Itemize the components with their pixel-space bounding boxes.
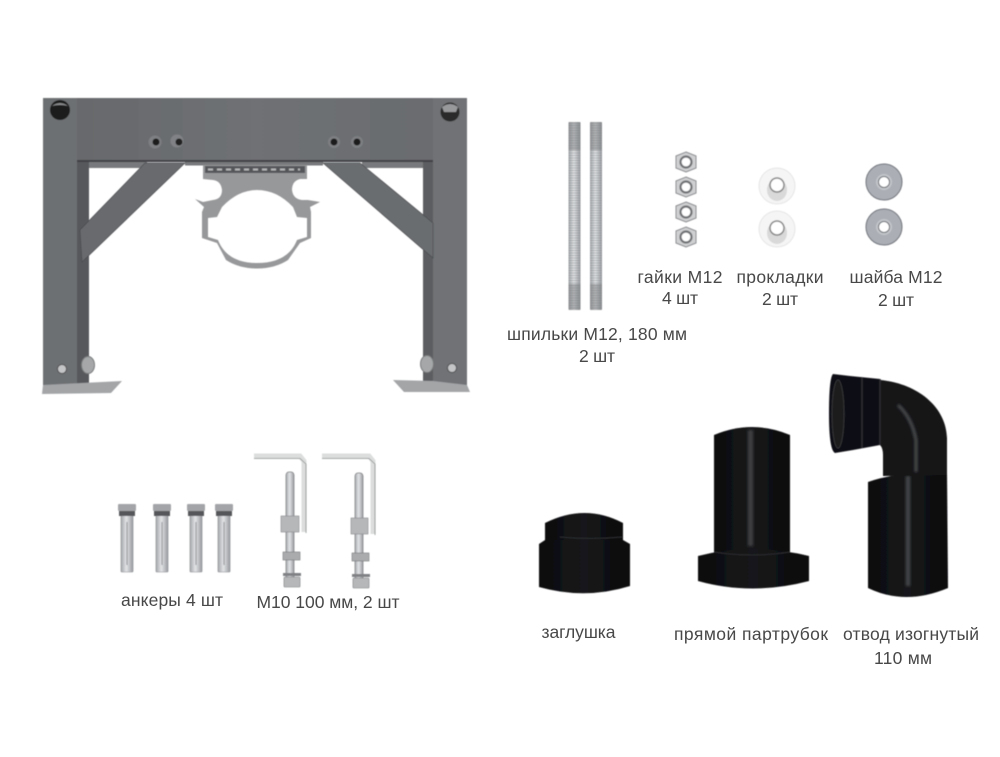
left foot: [42, 381, 122, 394]
plug: [539, 513, 630, 593]
plug lower body: [539, 540, 630, 593]
washer 1: [866, 164, 902, 200]
gasket 2: [759, 211, 795, 247]
label: elbow size: 110 мм: [874, 648, 932, 668]
washers: [866, 164, 902, 245]
anchor 2: [153, 504, 171, 572]
label: straight pipe: прямой партрубок: [674, 624, 828, 644]
elbow bend highlight: [898, 405, 916, 472]
socket ribs: [862, 378, 880, 448]
frame holes: [50, 100, 460, 374]
left brace: [80, 163, 185, 262]
gasket 1: [759, 168, 795, 204]
nut 3: [676, 202, 696, 222]
right brace: [323, 163, 433, 258]
label: studs: шпильки М12, 180 мм: [507, 324, 687, 344]
curved elbow: [829, 374, 948, 597]
bracket bolts: [254, 456, 375, 588]
label: gaskets quantity: 2 шт: [762, 289, 798, 309]
anchor 4: [215, 504, 233, 572]
left leg: [43, 98, 89, 385]
elbow rubber socket: [829, 374, 880, 453]
straight pipe: [698, 427, 809, 588]
anchor 1: [118, 504, 136, 572]
mounting frame: [42, 98, 470, 394]
label: gaskets: прокладки: [736, 267, 824, 287]
pipe clamp: [195, 165, 320, 268]
nuts: [676, 152, 696, 247]
bracket bolt 1: [254, 456, 306, 587]
nut 1: [676, 152, 696, 172]
right leg: [423, 98, 467, 385]
stud 2: [590, 122, 602, 310]
label: elbow: отвод изогнутый: [843, 624, 979, 644]
nut 4: [676, 227, 696, 247]
anchor 3: [187, 504, 205, 572]
plug seam: [560, 537, 622, 538]
label: washers: шайба М12: [850, 267, 942, 287]
threaded studs: [568, 122, 602, 310]
elbow mouth highlight: [832, 380, 844, 448]
nut 2: [676, 177, 696, 197]
anchors: [118, 504, 233, 572]
straight pipe flange: [698, 549, 809, 588]
right foot: [393, 380, 470, 392]
washer 2: [866, 209, 902, 245]
bracket bolt 2: [322, 456, 375, 588]
label: plug: заглушка: [542, 622, 616, 642]
straight pipe tube: [714, 427, 790, 556]
top beam: [77, 98, 433, 168]
gaskets: [759, 168, 795, 247]
flange seam: [714, 552, 790, 555]
label: anchors: анкеры 4 шт: [121, 590, 223, 610]
label: nuts: гайки М12: [638, 267, 722, 287]
label: studs quantity: 2 шт: [579, 346, 615, 366]
label: washers quantity: 2 шт: [878, 290, 914, 310]
elbow lower socket: [868, 472, 948, 597]
elbow lower highlight: [906, 476, 910, 586]
stud 1: [568, 122, 580, 310]
foot bolts: [82, 356, 434, 374]
plug upper collar: [545, 513, 623, 546]
elbow bend: [880, 380, 947, 476]
label: bracket bolts: М10 100 мм, 2 шт: [256, 592, 400, 612]
straight pipe highlight: [748, 430, 753, 546]
label: nuts quantity: 4 шт: [662, 288, 698, 308]
